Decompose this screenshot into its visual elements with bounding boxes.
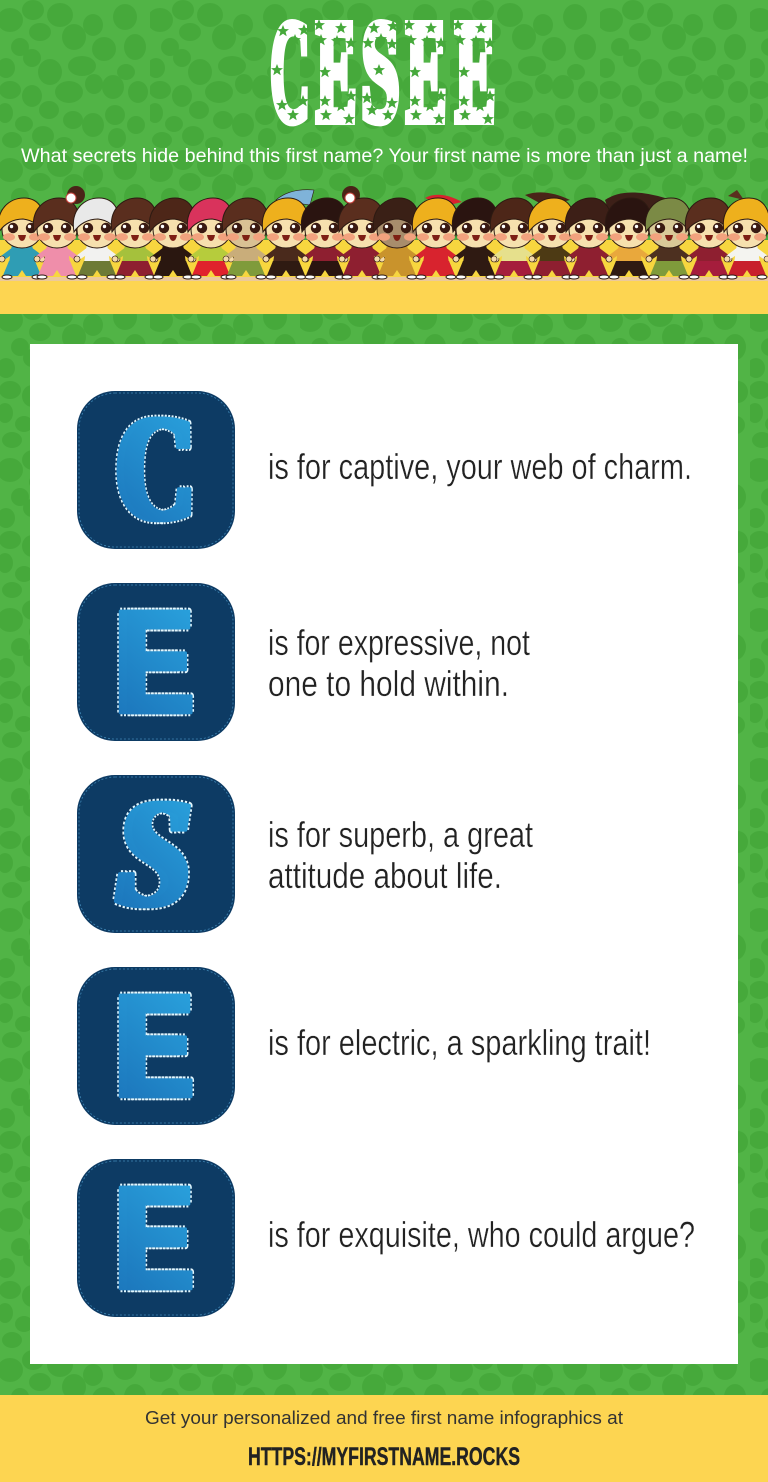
- icon: letter S: S: [121, 767, 195, 939]
- footer: [0, 1395, 768, 1482]
- icon: letter E: [77, 580, 235, 744]
- icon: letter S: S: [121, 767, 195, 939]
- icon: letter S: [77, 767, 235, 939]
- icon: letter E: E: [113, 964, 188, 1128]
- text: second E line: is for electric, a sparkling trait!: [268, 1022, 651, 1063]
- footer text: Get your personalized and free first name infographics at: [145, 1407, 623, 1428]
- icon: letter E: E: [113, 1156, 188, 1320]
- row of cartoon children: [0, 186, 768, 279]
- icon: letter C: C: [120, 384, 198, 552]
- icon: letter E: [77, 1156, 235, 1320]
- icon: letter E: [77, 964, 235, 1128]
- subtitle: What secrets hide behind this first name? Your first name is more than just a name!: [21, 145, 748, 167]
- white content panel: [30, 344, 738, 1364]
- icon: letter C: C: [112, 384, 192, 552]
- icon: letter E: E: [113, 1156, 188, 1320]
- text: S lines: is for superb, a great: [268, 814, 533, 855]
- text: first E lines: is for expressive, not: [268, 622, 530, 663]
- yellow banner: [0, 240, 768, 314]
- accessory: hair buns and hats behind the heads: [67, 186, 744, 215]
- icon: letter E: E: [121, 964, 196, 1128]
- icon: letter E: E: [121, 1156, 196, 1320]
- icon: letter C: C: [112, 384, 192, 552]
- icon: letter E: E: [113, 580, 188, 744]
- text: first E lines: one to hold within.: [268, 663, 509, 704]
- page background: [0, 314, 768, 1395]
- text: S lines: [268, 814, 533, 896]
- icon: letter E: E: [121, 580, 196, 744]
- icon: letter E: E: [113, 964, 188, 1128]
- icon: letter E: E: [121, 1156, 196, 1320]
- icon: letter C: [77, 384, 235, 552]
- title: [270, 0, 496, 152]
- footer url: HTTPS://MYFIRSTNAME.ROCKS: [248, 1443, 520, 1471]
- icon: letter E: E: [113, 580, 188, 744]
- icon: letter E: E: [121, 964, 196, 1128]
- icon: letter S: S: [113, 767, 187, 939]
- text: first E lines: [268, 622, 530, 704]
- icon: letter S: S: [113, 767, 187, 939]
- header background: [0, 0, 768, 314]
- icon: hair flowers: [66, 193, 355, 203]
- icon: letter C: C: [120, 384, 198, 552]
- icon: letter E: E: [121, 580, 196, 744]
- text: S lines: attitude about life.: [268, 855, 502, 896]
